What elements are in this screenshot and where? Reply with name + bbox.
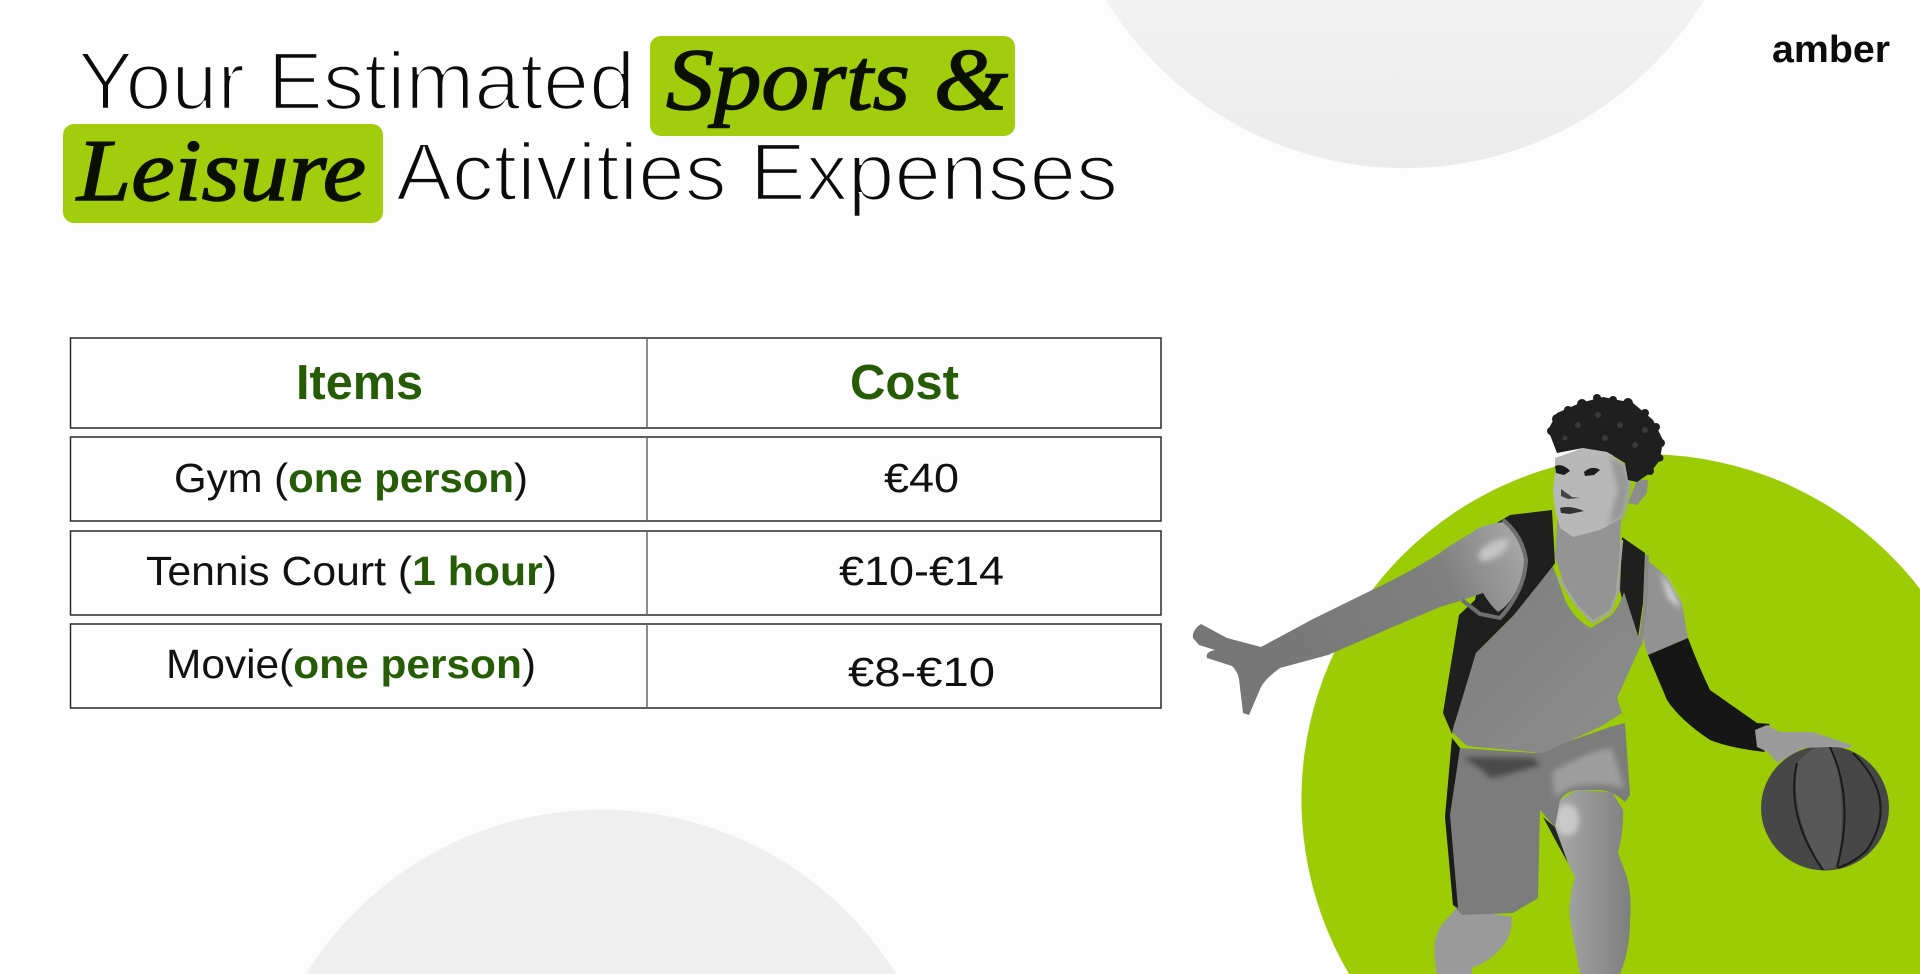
- gym cost: €40: [884, 455, 959, 501]
- jersey armhole trim: [1462, 520, 1526, 618]
- header: Items: Items: [296, 356, 423, 410]
- shoulder highlight right: [1660, 572, 1681, 610]
- shorts: [1445, 723, 1630, 915]
- basketball: [1761, 745, 1889, 870]
- gym label: Gym (one person): [174, 455, 528, 501]
- knee highlight: [1555, 804, 1579, 836]
- dribbling hand: [1755, 725, 1852, 763]
- ball centre panel: [1796, 745, 1842, 870]
- right shoulder: [1643, 560, 1688, 655]
- face shadow: [1608, 456, 1630, 525]
- title: [63, 32, 1118, 223]
- tennis label: Tennis Court ( 1 hour): [146, 548, 557, 594]
- green circle behind player: [1301, 454, 1920, 974]
- table: [70, 338, 1161, 708]
- background circle: top: [1106, 0, 1704, 168]
- front leg: [1555, 790, 1631, 974]
- movie label: Movie(one person): [166, 641, 536, 687]
- ear: [1628, 480, 1648, 505]
- jersey right trim: [1640, 555, 1647, 645]
- title highlight: Leisure: [63, 124, 383, 223]
- shorts light panel: [1552, 748, 1624, 798]
- ball seams: [1794, 747, 1881, 870]
- header: Cost: Cost: [850, 356, 959, 410]
- movie cost: €8-€10: [848, 649, 995, 695]
- black sleeve: [1648, 638, 1770, 752]
- title text: Activities Expenses: Activities Expenses: [396, 127, 1118, 218]
- shorts side stripe: [1445, 738, 1460, 908]
- jersey body: [1452, 566, 1641, 753]
- illustration: basketball player: [1193, 394, 1889, 974]
- title text: Your Estimated: Your Estimated: [78, 36, 635, 127]
- tennis cost: €10-€14: [839, 548, 1004, 594]
- shoulder highlight: [1479, 539, 1510, 561]
- jersey right dark strap: [1620, 537, 1645, 645]
- table header row: [70, 338, 1161, 428]
- hair: [1547, 394, 1665, 482]
- neck and chest: [1555, 500, 1622, 622]
- table row: gym: [70, 437, 1161, 521]
- shorts shadow folds: [1463, 757, 1540, 778]
- logo: amber: amber: [1772, 29, 1890, 71]
- table row: movie: [70, 624, 1161, 708]
- title text: Sports &: Sports &: [666, 32, 1009, 129]
- title highlight: Sports &: [650, 36, 1015, 136]
- jersey left dark panel: [1443, 510, 1555, 734]
- face features: [1555, 465, 1600, 514]
- title text: Leisure: Leisure: [75, 123, 366, 220]
- back leg: [1434, 908, 1512, 974]
- inner shorts shadow: [1543, 817, 1568, 863]
- background circle: bottom: [306, 810, 896, 974]
- face: [1553, 448, 1630, 537]
- left arm: [1193, 522, 1525, 715]
- jersey collar: [1558, 540, 1622, 622]
- table row: tennis court: [70, 531, 1161, 615]
